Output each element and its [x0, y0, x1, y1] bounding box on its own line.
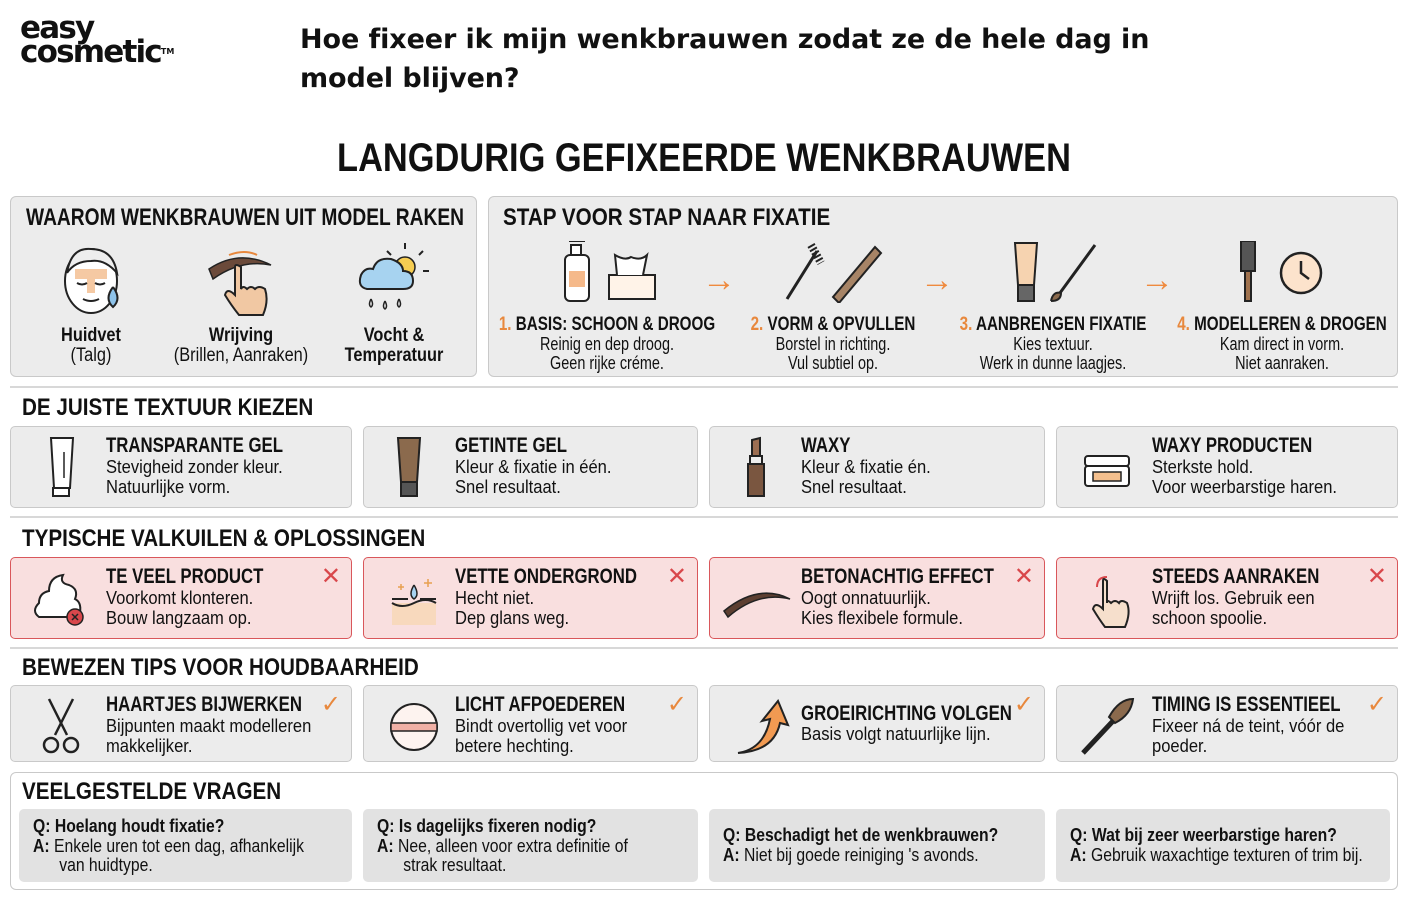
card: groeirichting volgen: Basis volgt natuurlijke lijn.: [801, 724, 991, 744]
icon: check: ✓: [667, 691, 687, 718]
card: timing: Fixeer ná de teint, vóór de: [1152, 716, 1344, 736]
card: betonachtig effect: Kies flexibele formule.: [801, 608, 963, 628]
card: vette ondergrond: Hecht niet.: [455, 588, 534, 608]
card: timing: TIMING IS ESSENTIEEL: [1152, 693, 1341, 716]
step 2: [751, 313, 915, 373]
subtitle question: Hoe fixeer ik mijn wenkbrauwen zodat ze de hele dag in model blijven?: [300, 24, 1149, 94]
card: licht afpoederen: [363, 685, 698, 762]
step 4: Niet aanraken.: [1235, 352, 1329, 373]
step 1: Reinig en dep droog.: [540, 333, 674, 354]
icon: check: ✓: [321, 691, 341, 718]
label: Huidvet: Huidvet: [61, 325, 121, 346]
card: getinte gel: GETINTE GEL: [455, 434, 567, 457]
card: haartjes bijwerken: Bijpunten maakt modelleren: [106, 716, 311, 736]
faq 2: strak resultaat.: [403, 854, 506, 875]
card: te veel product: TE VEEL PRODUCT: [106, 565, 263, 588]
card: getinte gel: Snel resultaat.: [455, 476, 561, 496]
card: getinte gel: Kleur & fixatie in één.: [455, 457, 612, 477]
heading: FAQ: VEELGESTELDE VRAGEN: [22, 778, 281, 805]
card: vette ondergrond: [363, 557, 698, 639]
icon: face: [64, 248, 119, 314]
card: transparante gel: Natuurlijke vorm.: [106, 476, 230, 496]
step 2: Vul subtiel op.: [788, 352, 878, 373]
card: waxy producten: WAXY PRODUCTEN: [1152, 434, 1312, 457]
card: vette ondergrond: Dep glans weg.: [455, 608, 569, 628]
label: Huidvet: (Talg): [71, 345, 111, 366]
icon: cross: ✕: [1367, 563, 1387, 590]
label: Vocht: Temperatuur: [345, 345, 443, 366]
icon: spoolie and pencil: [786, 243, 882, 303]
faq 3: Q: Beschadigt het de wenkbrauwen?: [723, 824, 998, 845]
faq 4: [1056, 809, 1390, 882]
card: te veel product: Bouw langzaam op.: [106, 608, 251, 628]
icon: check: ✓: [1014, 691, 1034, 718]
step 1: Geen rijke créme.: [550, 352, 664, 373]
icon: check: ✓: [1367, 691, 1387, 718]
label: Huidvet: [61, 325, 121, 366]
heading: texture: DE JUISTE TEXTUUR KIEZEN: [22, 394, 313, 421]
card: haartjes bijwerken: [10, 685, 352, 762]
card: waxy producten: [1056, 426, 1398, 508]
card: timing: poeder.: [1152, 736, 1207, 756]
card: waxy: WAXY: [801, 434, 850, 457]
card: waxy: [709, 426, 1045, 508]
card: haartjes bijwerken: makkelijker.: [106, 736, 193, 756]
logo: cosmeticTM: [20, 34, 174, 70]
label: Vocht: [344, 325, 444, 366]
panel: steps: [488, 196, 1398, 377]
step 3: 3. AANBRENGEN FIXATIE: [960, 313, 1146, 335]
card: getinte gel: [363, 426, 698, 508]
card: steeds aanraken: [1056, 557, 1398, 639]
heading: causes: WAAROM WENKBRAUWEN UIT MODEL RAKEN: [26, 204, 464, 231]
card: waxy producten: Voor weerbarstige haren.: [1152, 476, 1337, 496]
faq 4: A: Gebruik waxachtige texturen of trim bij.: [1070, 844, 1363, 864]
faq 3: A: Niet bij goede reiniging 's avonds.: [723, 844, 979, 864]
card: groeirichting volgen: [709, 685, 1045, 762]
label: Vocht: Vocht &: [364, 325, 424, 346]
icon: rubbing: [208, 251, 272, 316]
heading: tips: BEWEZEN TIPS VOOR HOUDBAARHEID: [22, 654, 419, 681]
panel: causes: [10, 196, 477, 377]
card: betonachtig effect: BETONACHTIG EFFECT: [801, 565, 994, 588]
faq 1: Q: Hoelang houdt fixatie?: [33, 815, 224, 836]
panel: FAQ: [10, 772, 1398, 890]
card: timing: [1056, 685, 1398, 762]
card: transparante gel: TRANSPARANTE GEL: [106, 434, 283, 457]
label: Wrijving: (Brillen, Aanraken): [174, 345, 308, 366]
icon: cross: ✕: [1014, 563, 1034, 590]
card: steeds aanraken: schoon spoolie.: [1152, 608, 1267, 628]
icon: cross: ✕: [321, 563, 341, 590]
faq 1: van huidtype.: [59, 854, 153, 875]
card: licht afpoederen: Bindt overtollig vet voor: [455, 716, 627, 736]
card: transparante gel: [10, 426, 352, 508]
card: licht afpoederen: LICHT AFPOEDEREN: [455, 693, 625, 716]
card: groeirichting volgen: GROEIRICHTING VOLGEN: [801, 702, 1012, 725]
faq 2: A: Nee, alleen voor extra definitie of: [377, 834, 628, 856]
heading: steps: STAP VOOR STAP NAAR FIXATIE: [503, 204, 830, 231]
faq 4: Q: Wat bij zeer weerbarstige haren?: [1070, 824, 1337, 845]
card: steeds aanraken: Wrijft los. Gebruik een: [1152, 588, 1315, 608]
card: waxy: Kleur & fixatie én.: [801, 457, 931, 477]
logo: easy: [20, 10, 93, 46]
label: Wrijving: Wrijving: [209, 325, 273, 346]
card: transparante gel: Stevigheid zonder kleur.: [106, 457, 283, 477]
faq 3: [709, 809, 1045, 882]
card: waxy producten: Sterkste hold.: [1152, 457, 1253, 477]
icon: cross: ✕: [667, 563, 687, 590]
step 4: Kam direct in vorm.: [1220, 333, 1344, 354]
icon: bottle and tissue: [564, 241, 656, 302]
card: vette ondergrond: VETTE ONDERGROND: [455, 565, 637, 588]
heading: pitfalls: TYPISCHE VALKUILEN & OPLOSSINGEN: [22, 525, 425, 552]
card: te veel product: Voorkomt klonteren.: [106, 588, 253, 608]
step 1: 1. BASIS: SCHOON & DROOG: [499, 313, 715, 335]
step 2: Borstel in richting.: [776, 333, 890, 354]
faq 1: A: Enkele uren tot een dag, afhankelijk: [33, 834, 304, 856]
step 3: [960, 313, 1146, 373]
card: te veel product: [10, 557, 352, 639]
step 4: 4. MODELLEREN & DROGEN: [1177, 313, 1387, 335]
step 2: 2. VORM & OPVULLEN: [751, 313, 915, 335]
faq 2: [363, 809, 698, 882]
icon: weather: [358, 243, 429, 310]
card: haartjes bijwerken: HAARTJES BIJWERKEN: [106, 693, 302, 716]
card: steeds aanraken: STEEDS AANRAKEN: [1152, 565, 1319, 588]
label: Wrijving: [174, 325, 308, 366]
card: waxy: Snel resultaat.: [801, 476, 907, 496]
card: licht afpoederen: betere hechting.: [455, 736, 574, 756]
icon: spoolie and clock: [1240, 241, 1322, 302]
main title: LANGDURIG GEFIXEERDE WENKBRAUWEN: [337, 136, 1071, 180]
arrow 2: →: [920, 261, 954, 299]
faq 1: [19, 809, 352, 882]
step 4: [1177, 313, 1387, 373]
card: betonachtig effect: Oogt onnatuurlijk.: [801, 588, 931, 608]
step 3: Kies textuur.: [1013, 333, 1093, 354]
card: betonachtig effect: [709, 557, 1045, 639]
faq 2: Q: Is dagelijks fixeren nodig?: [377, 815, 596, 836]
step 1: [499, 313, 715, 373]
logo: [20, 10, 174, 70]
icon: gel tube and brush: [1014, 242, 1096, 302]
step 3: Werk in dunne laagjes.: [980, 352, 1126, 373]
arrow 3: →: [1140, 261, 1174, 299]
arrow 1: →: [702, 261, 736, 299]
